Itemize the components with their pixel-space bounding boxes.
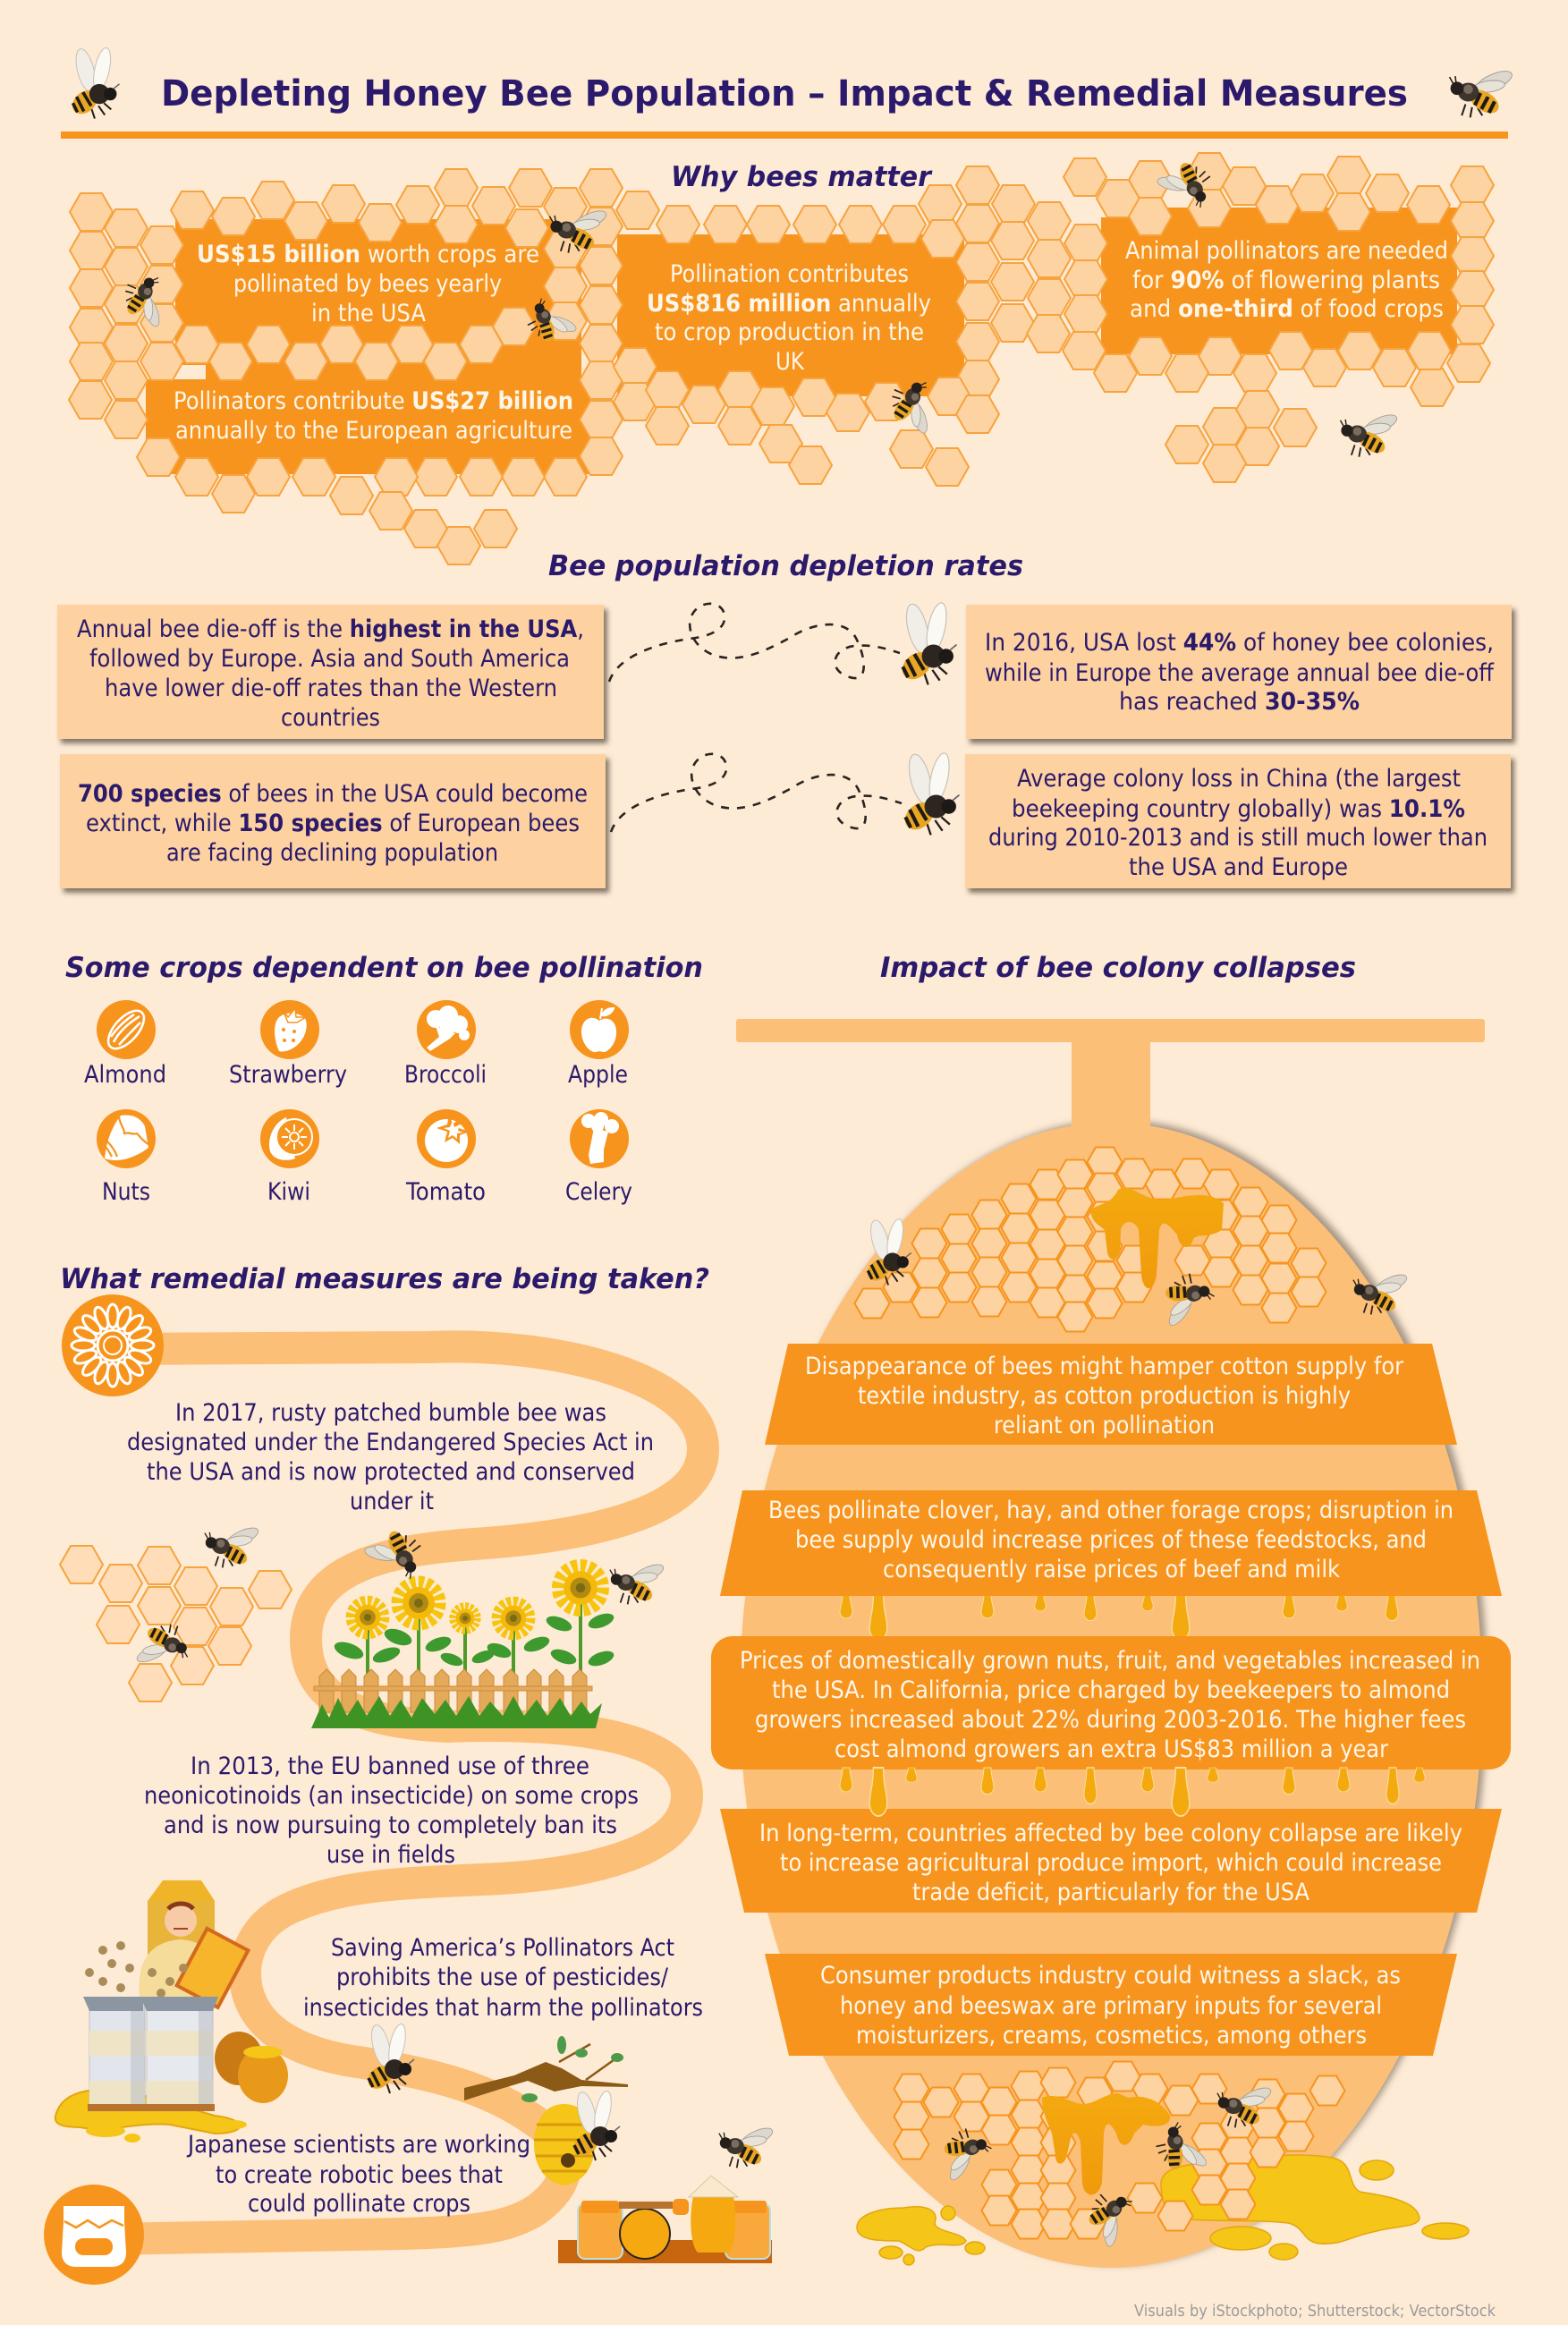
bees at top of hive [863, 1218, 1409, 1331]
panel: 700 species: 700 species of bees in the USA could become [78, 780, 588, 808]
text: Saving America's Pollinators Act: Saving America’s Pollinators Act [331, 1934, 674, 1962]
text: Saving America's Pollinators Act [303, 1934, 703, 2022]
panel: annual die-off: countries [281, 704, 380, 732]
text: US$15 billion [197, 241, 539, 327]
banner: consumer products: moisturizers, creams, cosmetics, among others [856, 2022, 1367, 2049]
banner: forage crops: consequently raise prices of beef and milk [883, 1556, 1340, 1583]
title: Depleting Honey Bee Population – Impact & Remedial Measures [161, 73, 1408, 115]
text: US$27 billion: Pollinators contribute US$27 billion [174, 387, 573, 415]
text: 2013 measure: In 2013, the EU banned use of three [191, 1752, 589, 1780]
banner: trade deficit [720, 1809, 1502, 1913]
text: US$27 billion: annually to the European agriculture [175, 417, 572, 445]
banner: consumer products: Consumer products industry could witness a slack, as [820, 1962, 1401, 1990]
icon: bee bottom flight [900, 751, 959, 835]
icon: broccoli [417, 1000, 476, 1059]
text: 2017 measure: In 2017, rusty patched bumble bee was [175, 1399, 606, 1427]
bees on the honeycomb [122, 150, 1399, 457]
crop labels: Tomato [405, 1178, 486, 1206]
banner: forage crops [720, 1490, 1502, 1596]
heading: bee population depletion rates: Bee population depletion rates [548, 550, 1023, 582]
panel: USA lost 44%: In 2016, USA lost 44% of honey bee colonies, [985, 629, 1494, 657]
panel: 700 species: extinct, while 150 species of European bees [86, 810, 580, 837]
text: 2013 measure: use in fields [326, 1841, 455, 1869]
panel: annual die-off: followed by Europe. Asia and South America [89, 645, 570, 673]
panel: why bees matter honeycomb [69, 150, 1494, 564]
banner: forage crops: Bees pollinate clover, hay, and other forage crops; disruption in [768, 1497, 1454, 1524]
icon: honey jar end [44, 2185, 144, 2285]
hanging stem [1072, 1042, 1150, 1132]
honey drips under forage banner [840, 1594, 1398, 1640]
text: 2017 measure: under it [350, 1488, 434, 1515]
text: US$15 billion: US$15 billion worth crops are [197, 241, 539, 268]
honey drip top [1090, 1188, 1224, 1288]
icon: apple [570, 1000, 629, 1059]
banner: consumer products: honey and beeswax are primary inputs for several [840, 1992, 1382, 2020]
banner: trade deficit: In long-term, countries affected by bee colony collapse are likely [759, 1820, 1462, 1847]
icon: kiwi [260, 1109, 319, 1168]
icon: bee above jars [719, 2125, 775, 2168]
text: 2017 measure [127, 1399, 654, 1515]
crop labels: Broccoli [404, 1061, 487, 1089]
text: US$27 billion [174, 387, 573, 445]
text: Japanese scientists: Japanese scientists are working [186, 2131, 530, 2159]
text: Japanese scientists: could pollinate crops [248, 2190, 470, 2218]
text: Saving America's Pollinators Act: insecticides that harm the pollinators [303, 1994, 703, 2022]
panel: China colony loss: during 2010-2013 and is still much lower than [988, 824, 1487, 852]
icon: flower start [62, 1294, 164, 1396]
icon: bee left of title [68, 47, 120, 119]
icon: nuts [97, 1109, 156, 1168]
text: US$15 billion: pollinated by bees yearly [233, 270, 502, 298]
icon: bee on road [363, 2023, 414, 2093]
panel: USA lost 44%: while in Europe the average annual bee die-off [985, 659, 1495, 687]
icon: celery [570, 1109, 629, 1168]
crop labels [84, 1061, 632, 1206]
panel: USA lost 44% [966, 605, 1512, 739]
banner: forage crops: bee supply would increase prices of these feedstocks, and [795, 1526, 1427, 1554]
text: US$15 billion: in the USA [311, 300, 426, 327]
text: US$816 million [647, 260, 931, 376]
panel: 700 species [60, 754, 606, 888]
icon: almond [97, 1000, 156, 1059]
bottom honeycomb [894, 2061, 1345, 2238]
road band [107, 1346, 703, 2239]
panel: China colony loss: beekeeping country globally) was 10.1% [1012, 795, 1465, 823]
heading: remedial measures: What remedial measures are being taken? [60, 1263, 709, 1295]
crop labels: Celery [565, 1178, 632, 1206]
icon: bee top flight [897, 601, 957, 684]
heading: impact: Impact of bee colony collapses [880, 952, 1356, 984]
text: Japanese scientists [186, 2131, 530, 2218]
text: animal pollinators [1125, 237, 1448, 323]
banner: prices: the USA. In California, price charged by beekeepers to almond [772, 1676, 1450, 1704]
hive body [740, 1123, 1482, 2268]
panel: 700 species: are facing declining population [166, 839, 498, 867]
text: Japanese scientists: to create robotic bees that [216, 2161, 503, 2189]
icon: bee on hive [569, 2090, 620, 2160]
text: 2013 measure: and is now pursuing to completely ban its [164, 1812, 617, 1839]
panel: annual die-off: Annual bee die-off is the highest in the USA, [77, 615, 584, 643]
text: 2017 measure: designated under the Endangered Species Act in [127, 1429, 654, 1456]
arrow: dashed flight path top [609, 604, 900, 682]
crop labels: Nuts [102, 1178, 150, 1206]
title rule [61, 132, 1508, 139]
top honeycomb [855, 1147, 1326, 1331]
crop labels: Strawberry [229, 1061, 347, 1089]
banner: prices: Prices of domestically grown nuts, fruit, and vegetables increased in [740, 1647, 1480, 1675]
bees around garden and cluster [135, 1518, 665, 1666]
credit line: Visuals by iStockphoto; Shutterstock; VectorStock [1134, 2302, 1496, 2321]
panel: impact hive [711, 1019, 1511, 2268]
panel: China colony loss [965, 754, 1511, 888]
icon: bee right of title [1450, 67, 1514, 118]
honey drip bottom [1042, 2093, 1170, 2195]
banner: cotton: reliant on pollination [994, 1412, 1215, 1439]
banner: trade deficit: to increase agricultural produce import, which could increase [780, 1849, 1442, 1877]
panel: annual die-off [57, 605, 604, 739]
text: US$816 million: US$816 million annually [647, 290, 931, 318]
heading: some crops: Some crops dependent on bee pollination [65, 952, 703, 984]
banner: cotton: textile industry, as cotton production is highly [858, 1382, 1351, 1410]
banner: prices: growers increased about 22% during 2003-2016. The higher fees [755, 1706, 1466, 1734]
panel: annual die-off: have lower die-off rates than the Western [105, 675, 557, 702]
text: 2013 measure [144, 1752, 639, 1869]
bees at bottom of hive [929, 2084, 1273, 2252]
text: US$816 million: to crop production in the [655, 318, 924, 346]
text: 2017 measure: the USA and is now protected and conserved [147, 1458, 635, 1486]
panel: China colony loss: the USA and Europe [1129, 853, 1348, 881]
illustration: branch with hive [464, 2036, 628, 2185]
crop labels: Apple [568, 1061, 628, 1089]
hanging bar [736, 1019, 1485, 1042]
honeycomb cells [69, 153, 1494, 564]
crop labels: Almond [84, 1061, 166, 1089]
text: animal pollinators: Animal pollinators are needed [1125, 237, 1448, 265]
honeycomb cluster left [60, 1546, 292, 1701]
text: US$816 million: Pollination contributes [670, 260, 909, 288]
orange block backgrounds [146, 208, 1457, 474]
text: US$816 million: UK [776, 348, 805, 376]
honey puddle left [857, 2206, 985, 2265]
panel: crops grid [84, 1000, 632, 1206]
text: 2013 measure: neonicotinoids (an insecticide) on some crops [144, 1782, 639, 1810]
banner: trade deficit: trade deficit, particularly for the USA [912, 1879, 1309, 1906]
banner: cotton: Disappearance of bees might hamper cotton supply for [805, 1353, 1404, 1380]
honey puddle right [1161, 2155, 1469, 2260]
panel: remedial measures winding road [44, 1294, 775, 2285]
heading: why bees matter: Why bees matter [671, 161, 933, 193]
illustration: beekeeper with hives [55, 1880, 288, 2143]
icon: strawberry [260, 1000, 319, 1059]
arrow: dashed flight path bottom [611, 754, 902, 832]
panel: China colony loss: Average colony loss in China (the largest [1017, 765, 1461, 793]
banner: prices: cost almond growers an extra US$83 million a year [835, 1735, 1389, 1763]
banner: prices [711, 1636, 1511, 1769]
text: animal pollinators: and one-third of food crops [1130, 295, 1444, 323]
banner: cotton [765, 1344, 1457, 1445]
icon: tomato [417, 1109, 476, 1168]
text: animal pollinators: for 90% of flowering plants [1132, 267, 1440, 294]
banner: consumer products [765, 1954, 1457, 2056]
text: Saving America's Pollinators Act: prohibits the use of pesticides/ [336, 1964, 669, 1991]
illustration: honey jars on shelf [558, 2176, 772, 2263]
honey drips under prices banner [840, 1768, 1425, 1816]
panel: USA lost 44%: has reached 30-35% [1119, 688, 1360, 716]
crop labels: Kiwi [267, 1178, 310, 1206]
illustration: sunflower garden [311, 1566, 615, 1728]
